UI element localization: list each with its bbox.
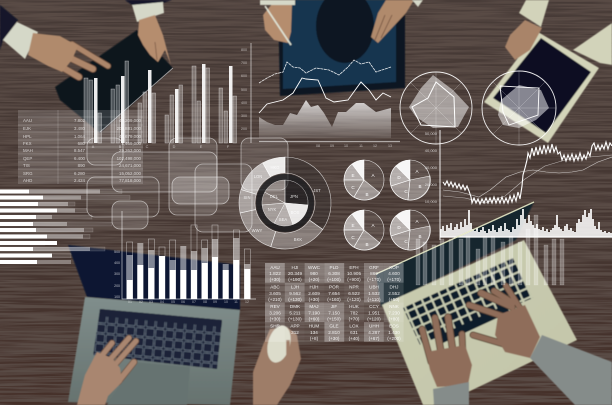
top bars axis: 700 xyxy=(241,61,247,65)
area and line chart: 13 xyxy=(388,144,392,148)
bottom chart x labels xyxy=(128,300,249,304)
donut labels: BKK xyxy=(294,237,302,242)
heat table: 134 xyxy=(310,330,318,335)
bottom chart x labels: 05 xyxy=(171,300,175,304)
heat table: (+130) xyxy=(288,316,302,322)
donut labels: LON xyxy=(254,174,262,179)
top-left cuff xyxy=(3,22,38,59)
heat table: 3.206 xyxy=(269,310,281,316)
donut labels: JPN xyxy=(290,194,298,199)
table panel: MAH xyxy=(23,148,33,153)
heat table: 10.905 xyxy=(347,271,361,276)
right keyboard lower band xyxy=(438,305,510,343)
right sleeve lower xyxy=(530,335,612,405)
donut labels: DEL xyxy=(270,194,279,199)
heat table: REV xyxy=(270,304,281,309)
donut labels: BOS xyxy=(291,210,300,215)
pie top left xyxy=(344,160,384,200)
donut labels: NYK xyxy=(268,207,277,212)
vertical bars over right laptop xyxy=(416,215,564,285)
heat table: LOX xyxy=(349,324,359,328)
table panel: 8,469,000 xyxy=(121,141,142,146)
heat table: UHH xyxy=(369,324,379,328)
pie bottom left: A xyxy=(371,223,375,228)
heat table: HJI xyxy=(292,265,298,270)
top bars labels: F xyxy=(227,145,230,149)
top bars axis: 800 xyxy=(241,48,247,52)
table panel: 6.280 xyxy=(74,171,86,176)
heat table: 1.532 xyxy=(368,291,380,296)
left trackpad xyxy=(107,362,190,405)
right laptop screen xyxy=(376,202,534,307)
second cuff xyxy=(132,2,164,22)
top-right hand xyxy=(505,20,542,60)
bottom chart x labels: 11 xyxy=(234,300,238,304)
heat table: (+120) xyxy=(347,297,361,302)
top-right tablet screen xyxy=(493,38,591,133)
area and line chart: 09 xyxy=(330,144,334,148)
heat table: 4.287 xyxy=(368,330,380,335)
top bars axis: 500 xyxy=(241,88,247,92)
bottom chart y labels: 500 xyxy=(114,250,120,254)
table panel: 102,498,000 xyxy=(117,156,142,161)
pie bottom left: B xyxy=(365,242,369,247)
left laptop screen xyxy=(68,245,240,310)
mouse xyxy=(263,323,295,365)
table panel: 15,052,000 xyxy=(119,171,142,176)
line chart right xyxy=(425,130,612,240)
tablet reflection xyxy=(316,0,374,63)
heat table: 6.308 xyxy=(328,271,340,276)
heat table: 9.562 xyxy=(289,291,301,296)
heat table: (+210) xyxy=(268,297,282,302)
heat table: PLD xyxy=(330,265,339,270)
heat table: (+200) xyxy=(387,336,401,341)
right laptop screen edge line xyxy=(376,202,534,274)
table panel: 77,818,000 xyxy=(119,178,142,183)
heat table: GLE xyxy=(329,324,339,328)
heat table: WWC xyxy=(308,265,321,270)
heat table: MAJ xyxy=(309,304,319,309)
heat table: XOP xyxy=(389,265,399,270)
donut labels: SEA xyxy=(279,217,287,222)
pie bottom right: A xyxy=(415,219,419,224)
heat table: (+30) xyxy=(329,336,340,341)
radar chart right xyxy=(482,71,556,145)
donut labels: WWY xyxy=(252,228,263,233)
heat table: (+150) xyxy=(327,316,341,322)
heat table: (+190) xyxy=(288,277,302,282)
bottom chart x labels: 04 xyxy=(160,300,164,304)
heat table: (+40) xyxy=(349,336,360,341)
heat table: 3.605 xyxy=(269,291,281,296)
heat table: NNK xyxy=(389,304,400,309)
bar chart: top grouped bars xyxy=(84,43,251,149)
area and line chart: 11 xyxy=(359,144,363,148)
table panel: 890 xyxy=(78,163,86,168)
bottom chart x labels: 01 xyxy=(128,300,132,304)
top bars labels: A xyxy=(92,145,95,149)
heat table: HUK xyxy=(349,304,360,309)
area and line chart xyxy=(259,60,400,148)
mouse hand xyxy=(253,327,301,405)
pie top right: B xyxy=(418,184,422,189)
heat table: POR xyxy=(329,284,340,290)
table panel: QEP xyxy=(23,156,32,161)
bottom stacked bar chart xyxy=(114,211,256,304)
heat table: EOS xyxy=(389,324,399,328)
left keyboard top row xyxy=(99,309,222,327)
heat table: JIF xyxy=(331,304,337,309)
heat table: CCY xyxy=(369,304,379,309)
donut labels: SIN xyxy=(244,195,250,200)
table panel: 29,263,000 xyxy=(119,148,142,153)
top-left hand xyxy=(28,33,108,77)
table panel: HPL xyxy=(23,134,32,139)
heat table: UBH xyxy=(369,284,379,290)
heat table: (+170) xyxy=(367,277,381,282)
top bars labels: B xyxy=(119,145,122,149)
heat table: SHR xyxy=(270,324,281,328)
histogram right xyxy=(440,209,612,237)
bottom chart y labels xyxy=(114,250,120,299)
bottom chart x labels: 12 xyxy=(245,300,249,304)
top bars axis: 600 xyxy=(241,74,247,78)
bottom chart y labels: 400 xyxy=(114,261,120,265)
donut inner pie xyxy=(262,180,308,226)
area and line chart: 12 xyxy=(373,144,377,148)
bottom chart x labels: 02 xyxy=(139,300,143,304)
heat table: ABC xyxy=(270,284,280,290)
table panel: SRG xyxy=(23,171,33,176)
heat table: (+70) xyxy=(349,316,360,322)
heat table: 2.810 xyxy=(328,330,340,335)
bottom chart x labels: 09 xyxy=(213,300,217,304)
top bars labels: D xyxy=(173,145,176,149)
pie charts xyxy=(344,160,430,250)
line chart right: 50,000 xyxy=(425,131,438,136)
pie bottom right: D xyxy=(397,225,401,230)
heat table: (+170) xyxy=(387,277,401,282)
heat table: DHJ xyxy=(390,284,398,290)
table panel: 2.424 xyxy=(74,178,86,183)
heat table: 6.522 xyxy=(348,291,360,296)
top tablet screen xyxy=(283,0,396,89)
pie top left: E xyxy=(351,173,355,178)
left sleeve lower xyxy=(433,382,469,405)
top bars labels xyxy=(92,145,230,149)
heat table: 7.230 xyxy=(388,310,400,316)
top-centre hand with pen xyxy=(260,0,295,45)
heat table: (+60) xyxy=(309,316,320,322)
table panel: 24,671,000 xyxy=(119,163,142,168)
heat table: 5.211 xyxy=(289,310,301,316)
right laptop body xyxy=(382,240,577,405)
heat table: (+30) xyxy=(270,277,281,282)
rounded panels xyxy=(87,138,288,232)
donut dark ring xyxy=(259,177,311,229)
bottom chart x labels: 08 xyxy=(203,300,207,304)
heat table: AAU xyxy=(270,265,280,270)
pie bottom right xyxy=(390,210,430,250)
table panel: AAU xyxy=(23,118,32,123)
top-left sleeve xyxy=(0,5,18,50)
line chart right: 40,000 xyxy=(425,148,438,153)
donut labels: HKG xyxy=(270,165,280,170)
table panel: 44,679,000 xyxy=(119,134,142,139)
heat table: 312 xyxy=(291,330,299,335)
pie top right xyxy=(390,160,430,200)
area and line chart: 08 xyxy=(316,144,320,148)
table panel: 8.547 xyxy=(74,148,86,153)
heat table: (+30) xyxy=(309,297,320,302)
heat table: 7.150 xyxy=(328,310,340,316)
heat table: 631 xyxy=(350,330,358,335)
line chart right: 30,000 xyxy=(425,165,438,170)
top-centre right hand xyxy=(371,0,423,43)
pie bottom left xyxy=(344,210,384,250)
heat table: GRF xyxy=(369,265,379,270)
table panel: EJK xyxy=(23,126,31,131)
tablet edge line xyxy=(100,68,173,132)
bottom chart x labels: 07 xyxy=(192,300,196,304)
mouse fingers xyxy=(288,335,296,362)
heat table: 4.600 xyxy=(388,271,400,276)
bottom chart y labels: 100 xyxy=(114,295,120,299)
heat table: DMK xyxy=(290,304,301,309)
pie top right: A xyxy=(415,169,419,174)
bottom chart x labels: 06 xyxy=(181,300,185,304)
heat table: LJH xyxy=(291,284,299,290)
bottom chart y labels: 200 xyxy=(114,284,120,288)
pie top left: C xyxy=(351,185,355,190)
top tablet frame xyxy=(278,0,405,96)
heat table: (+30) xyxy=(270,316,281,322)
table panel: TIS xyxy=(23,163,30,168)
heat table: HJH xyxy=(310,284,318,290)
top-right cuff xyxy=(519,0,549,27)
table panel: 44,209,000 xyxy=(119,118,142,123)
heat table: 782 xyxy=(350,310,358,316)
heat table: (+67) xyxy=(369,336,380,341)
table panel: 209,881,000 xyxy=(117,126,142,131)
right upper hand xyxy=(469,286,540,358)
heat table: 2.552 xyxy=(388,291,400,296)
heat table: (+100) xyxy=(327,277,341,282)
donut outer segments xyxy=(239,157,331,249)
table panel: 1.064 xyxy=(74,134,86,139)
heat table: (+160) xyxy=(327,297,341,302)
pie bottom left: E xyxy=(351,223,355,228)
bottom chart y labels: 300 xyxy=(114,272,120,276)
top bars axis xyxy=(241,43,251,143)
line chart right: 20,000 xyxy=(425,182,438,187)
heat table: (+120) xyxy=(367,316,381,322)
area and line chart: 10 xyxy=(344,144,348,148)
heat table: 980 xyxy=(310,271,318,276)
heat table: (+80) xyxy=(389,316,400,322)
heat table: (+20) xyxy=(309,277,320,282)
heat table xyxy=(265,263,404,342)
heat table: (+50) xyxy=(389,297,400,302)
pie top right: C xyxy=(404,189,408,194)
left keyboard xyxy=(93,309,222,369)
top bars axis: 400 xyxy=(241,101,247,105)
line chart right: 10,000 xyxy=(425,199,438,204)
heat table: 1.430 xyxy=(388,330,400,335)
heat table: 860 xyxy=(370,271,378,276)
second sleeve xyxy=(125,0,172,5)
top bars axis: 200 xyxy=(241,127,247,131)
table panel: AHD xyxy=(23,178,32,183)
heat table: 7.654 xyxy=(328,291,340,296)
heat table: 1.822 xyxy=(269,271,281,276)
donut chart xyxy=(239,157,331,249)
top bars labels: C xyxy=(146,145,149,149)
right sleeve xyxy=(573,23,612,65)
table panel xyxy=(18,110,143,184)
pie top left: A xyxy=(371,173,375,178)
table panel: 680 xyxy=(78,141,86,146)
heat table: 2.609 xyxy=(308,291,320,296)
pie bottom right: C xyxy=(404,239,408,244)
bottom chart x labels: 10 xyxy=(224,300,228,304)
table panel: FKX xyxy=(23,141,32,146)
pie top left: B xyxy=(365,192,369,197)
heat table: 7.190 xyxy=(308,310,320,316)
left typing hand xyxy=(77,338,136,405)
pie top right: D xyxy=(397,175,401,180)
horizontal bar chart xyxy=(0,190,130,264)
right lower hand xyxy=(422,317,472,387)
top bars axis: 300 xyxy=(241,114,247,118)
heat table: NPR xyxy=(349,284,360,290)
heat table: (+8) xyxy=(310,336,319,341)
donut labels: JST xyxy=(313,188,321,193)
table panel: 3.480 xyxy=(74,126,86,131)
heat table: (+110) xyxy=(367,297,381,302)
table panel: 7.802 xyxy=(74,118,86,123)
heat table: HUM xyxy=(309,324,319,328)
right keyboard xyxy=(403,258,533,345)
donut labels xyxy=(244,165,321,242)
left laptop body xyxy=(68,297,240,405)
heat table: 1.951 xyxy=(368,310,380,316)
bottom chart x labels: 03 xyxy=(149,300,153,304)
heat table: 20.349 xyxy=(288,271,302,276)
top bars labels: E xyxy=(200,145,203,149)
heat table: (+900) xyxy=(347,277,361,282)
top-right tablet frame xyxy=(484,32,599,143)
heat table: (+130) xyxy=(288,297,302,302)
pie bottom left: C xyxy=(351,235,355,240)
heat table: APP xyxy=(290,324,300,328)
radar chart left xyxy=(400,72,472,144)
top-left tablet xyxy=(55,30,173,133)
bottom chart axes xyxy=(122,211,256,299)
second hand xyxy=(138,15,171,65)
pie bottom right: B xyxy=(418,234,422,239)
table panel: 6.400 xyxy=(74,156,86,161)
heat table: EFH xyxy=(349,265,359,270)
